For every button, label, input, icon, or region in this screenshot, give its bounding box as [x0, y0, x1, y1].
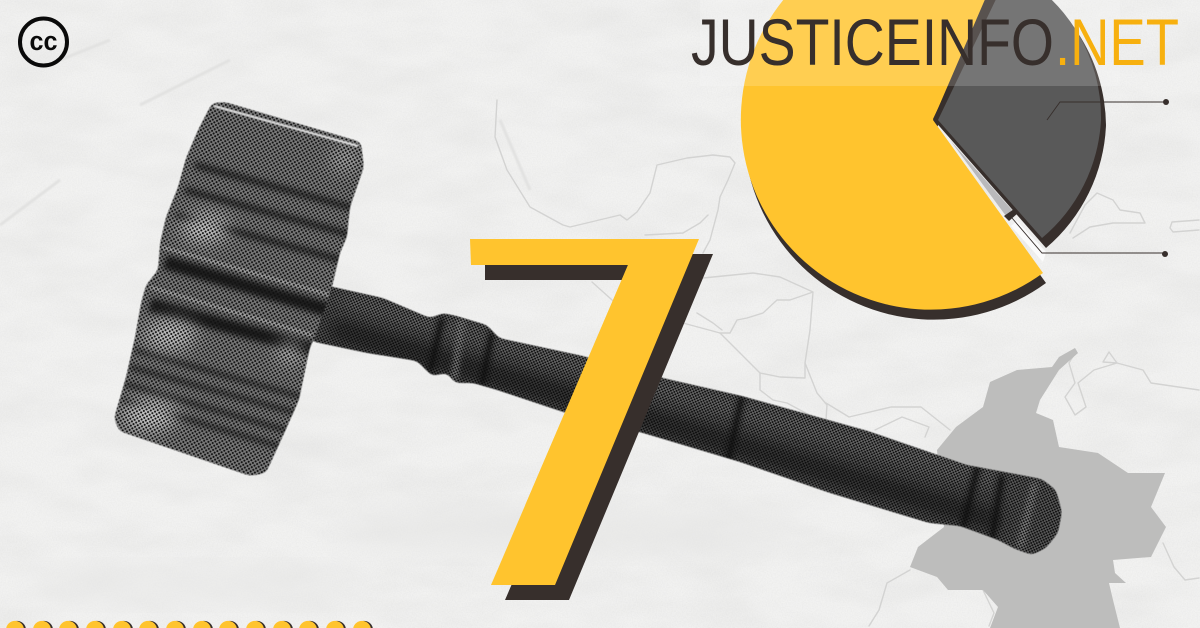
map: country outlines	[495, 100, 1199, 626]
pie chart	[700, 0, 1120, 320]
yellow slice shadow	[744, 0, 1046, 320]
small tab	[1004, 209, 1018, 221]
outline: venezuela	[1065, 352, 1199, 415]
map: Colombia silhouette	[910, 348, 1166, 628]
outline: hispaniola	[1070, 193, 1145, 238]
dotted strip	[6, 621, 373, 628]
icon: creative commons: cc	[30, 26, 58, 56]
grey slice	[938, 0, 1101, 238]
outline: honduras and nicaragua	[703, 273, 813, 378]
outline: mexico and yucatan	[495, 100, 735, 253]
number seven: 7	[425, 52, 703, 611]
white gap	[1011, 221, 1046, 262]
callout line upper	[1047, 99, 1169, 120]
grey slice shadow	[933, 0, 1106, 248]
yellow slice	[741, 0, 1043, 310]
outline: puerto rico	[1170, 220, 1199, 232]
number seven shadow: 7	[440, 67, 718, 626]
gavel handle	[312, 286, 1062, 554]
logo: JUSTICEINFO	[691, 5, 1054, 79]
translucent header band	[700, 0, 1120, 86]
gavel	[100, 90, 1080, 570]
separator strip	[950, 140, 1012, 216]
outline: costa rica and panama	[760, 363, 950, 437]
outline: southern borders	[869, 543, 1199, 626]
outline: belize and guatemala	[592, 215, 722, 333]
icon: creative commons	[20, 18, 67, 66]
callout line lower	[1012, 218, 1168, 257]
gavel head	[114, 102, 364, 476]
